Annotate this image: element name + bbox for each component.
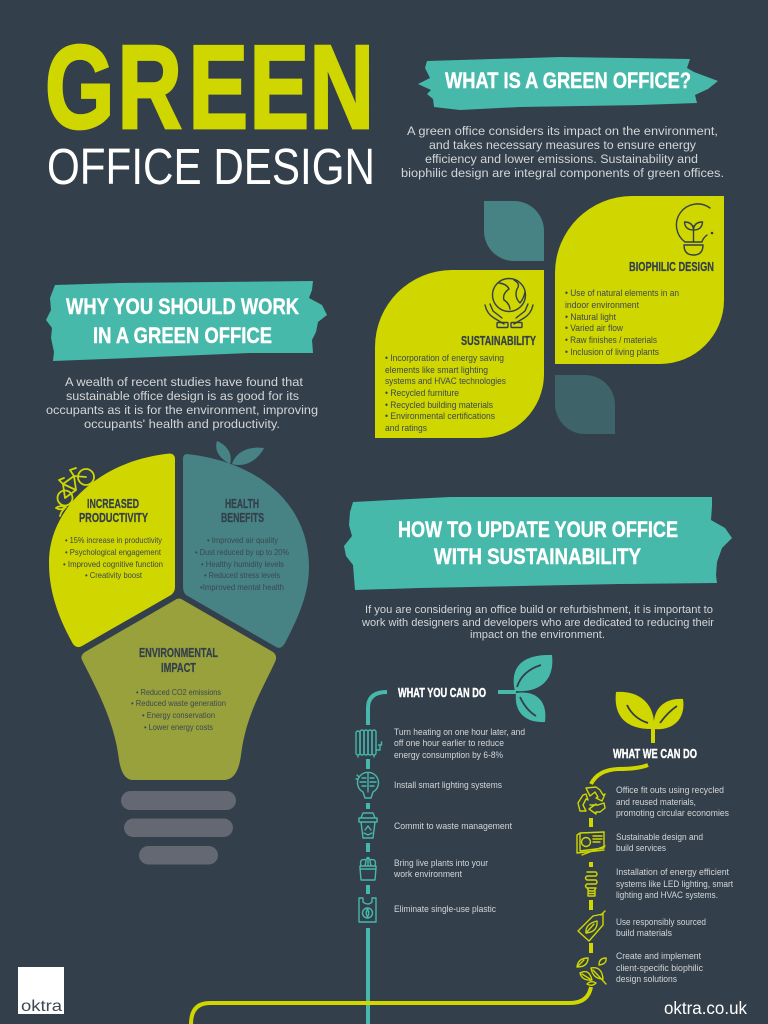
text: green office description <box>401 124 724 180</box>
list: sustainability: elements like smart lighting <box>385 365 488 375</box>
icon: eco tag <box>578 911 605 941</box>
panel: biophilic design <box>555 196 724 364</box>
text: how to update intro: impact on the environment. <box>470 629 605 641</box>
text: energy efficient systems: systems like LED lighting, smart <box>616 879 733 889</box>
heading: what is a green office: WHAT IS A GREEN OFFICE? <box>445 68 691 93</box>
text: biophilic solutions <box>616 951 703 984</box>
panel: what is a green office <box>401 57 724 180</box>
heading: why you should work <box>66 294 299 348</box>
panel: how to update your office <box>344 497 732 641</box>
list: health: •Improved mental health <box>200 582 284 592</box>
text: plastic: Eliminate single-use plastic <box>394 904 496 914</box>
text: studies summary: occupants' health and productivity. <box>84 417 280 431</box>
text: biophilic solutions: design solutions <box>616 974 677 984</box>
text: heating: Turn heating on one hour later, and <box>394 727 525 737</box>
list: biophilic design: • Varied air flow <box>565 323 623 333</box>
text: heating: off one hour earlier to reduce <box>394 738 504 748</box>
text: heating <box>394 727 525 760</box>
list: health: • Reduced stress levels <box>204 570 280 580</box>
heading: how to update <box>398 517 678 569</box>
panel: sustainability <box>375 270 544 438</box>
text: sourced materials: Use responsibly sourced <box>616 917 706 927</box>
text: studies summary: sustainable office design is as good for its <box>66 389 299 403</box>
item: sustainable design <box>577 832 703 855</box>
item: plastic <box>359 898 496 922</box>
icon: radiator <box>356 730 382 757</box>
list: biophilic design: • Raw finishes / materials <box>565 335 657 345</box>
text: energy efficient systems: Installation of energy efficient <box>616 867 729 877</box>
list: biophilic design <box>565 288 679 357</box>
heading: biophilic design: BIOPHILIC DESIGN <box>629 259 714 274</box>
brush banner: why work in a green office <box>46 281 327 361</box>
title: GREEN <box>45 22 374 154</box>
chart: light bulb benefits <box>49 441 309 864</box>
item: waste <box>359 813 512 838</box>
icon: yellow plant <box>616 692 683 743</box>
heading: health benefits: HEALTH <box>225 497 259 511</box>
list: health: • Dust reduced by up to 20% <box>195 547 289 557</box>
icon: light bulb with plant <box>676 204 713 255</box>
text: sourced materials <box>616 917 706 938</box>
panel: leaf diagram <box>375 196 724 438</box>
heading: environmental impact: ENVIRONMENTAL <box>139 646 218 660</box>
logo: oktra: oktra <box>21 998 62 1015</box>
panel: why you should work in a green office <box>46 281 327 431</box>
text: how to update intro <box>361 604 714 641</box>
list: environmental: • Energy conservation <box>142 710 215 720</box>
icon: leaves <box>577 958 606 985</box>
bulb base <box>121 791 236 864</box>
list: biophilic design: • Use of natural elements in an <box>565 288 679 298</box>
heading: environmental impact: IMPACT <box>161 661 196 675</box>
text: plants: work environment <box>393 869 462 879</box>
text: plants <box>393 858 488 879</box>
logo: oktra <box>18 967 64 1015</box>
list: productivity: • Improved cognitive function <box>63 559 163 569</box>
text: studies summary: occupants as it is for the environment, improving <box>46 403 318 417</box>
list: sustainability: • Recycled building materials <box>385 400 493 410</box>
icon: plastic bag <box>359 898 376 922</box>
icon: leaves <box>216 441 264 465</box>
text: biophilic solutions: client-specific biophilic <box>616 963 703 973</box>
heading: what you can do: WHAT YOU CAN DO <box>398 685 486 700</box>
yellow line <box>191 765 648 1024</box>
list: productivity <box>63 535 163 580</box>
timeline: what you can do <box>356 655 552 1024</box>
decorative leaf: top teal <box>484 201 544 261</box>
text: sustainable design <box>616 832 703 853</box>
decorative leaf: bottom teal <box>555 375 615 434</box>
list: health <box>195 535 289 592</box>
heading: why you should work: IN A GREEN OFFICE <box>93 323 272 348</box>
list: sustainability <box>385 353 506 433</box>
timeline: what we can do <box>191 692 733 1024</box>
heading: how to update: HOW TO UPDATE YOUR OFFICE <box>398 517 678 542</box>
item: plants <box>360 858 488 880</box>
text: studies summary <box>46 375 318 431</box>
item: smart lighting <box>356 772 502 798</box>
icon: hands holding globe <box>485 278 533 328</box>
bulb segment: health benefits <box>183 441 309 648</box>
list: environmental: • Lower energy costs <box>144 722 213 732</box>
item: recycled materials <box>578 785 729 818</box>
icon: bicycle <box>56 468 94 516</box>
text: plants: Bring live plants into your <box>394 858 488 868</box>
brush banner: how to update <box>344 497 732 590</box>
list: health: • Improved air quality <box>207 535 279 545</box>
list: sustainability: • Recycled furniture <box>385 388 459 398</box>
heading: increased productivity: PRODUCTIVITY <box>79 511 148 525</box>
item: heating <box>356 727 525 760</box>
text: studies summary: A wealth of recent studies have found that <box>65 375 304 389</box>
heading: sustainability: SUSTAINABILITY <box>461 333 536 348</box>
item: biophilic solutions <box>577 951 703 985</box>
website url: oktra.co.uk <box>664 998 747 1018</box>
text: how to update intro: If you are considering an office build or refurbishment, it is important to <box>365 604 713 616</box>
text: recycled materials: and reused materials, <box>616 797 696 807</box>
text: recycled materials <box>616 785 729 818</box>
icon: blueprint <box>577 832 605 855</box>
list: productivity: • Creativity boost <box>85 570 143 580</box>
bulb segment: environmental impact <box>81 598 276 780</box>
teal line <box>368 692 516 1024</box>
icon: recycling cup <box>359 813 377 838</box>
text: waste: Commit to waste management <box>394 821 512 831</box>
list: environmental: • Reduced CO2 emissions <box>136 687 221 697</box>
brush banner: what is a green office <box>418 57 718 110</box>
text: biophilic solutions: Create and implement <box>616 951 701 961</box>
text: green office description: and takes necessary measures to ensure energy <box>429 138 697 152</box>
heading: increased productivity: INCREASED <box>87 497 139 511</box>
heading: how to update: WITH SUSTAINABILITY <box>434 544 641 569</box>
text: sustainable design: Sustainable design and <box>616 832 703 842</box>
list: health: • Healthy humidity levels <box>201 559 284 569</box>
heading: health benefits: BENEFITS <box>221 511 264 525</box>
heading: why you should work: WHY YOU SHOULD WORK <box>66 294 299 319</box>
heading: health benefits <box>221 497 264 525</box>
icon: brain bulb <box>356 772 378 798</box>
heading: increased productivity <box>79 497 148 525</box>
heading: environmental impact <box>139 646 218 675</box>
icon: CFL bulb <box>586 872 597 896</box>
list: productivity: • 15% increase in productivity <box>65 535 163 545</box>
text: recycled materials: Office fit outs using recycled <box>616 785 724 795</box>
list: productivity: • Psychological engagement <box>65 547 162 557</box>
text: recycled materials: promoting circular economies <box>616 808 729 818</box>
list: sustainability: systems and HVAC technologies <box>385 376 506 386</box>
list: sustainability: and ratings <box>385 423 427 433</box>
title: OFFICE DESIGN <box>47 138 375 195</box>
bulb segment: increased productivity <box>49 454 175 647</box>
item: sourced materials <box>578 911 706 941</box>
text: green office description: efficiency and lower emissions. Sustainability and <box>425 152 698 166</box>
text: energy efficient systems: lighting and HVAC systems. <box>616 890 718 900</box>
text: sourced materials: build materials <box>616 928 672 938</box>
list: biophilic design: • Natural light <box>565 312 616 322</box>
list: sustainability: • Incorporation of energy saving <box>385 353 504 363</box>
icon: teal leaves <box>514 655 552 722</box>
text: sustainable design: build services <box>616 843 666 853</box>
text: green office description: biophilic design are integral components of green offices. <box>401 166 724 180</box>
item: energy efficient systems <box>586 867 733 900</box>
list: biophilic design: indoor environment <box>565 300 639 310</box>
icon: potted plant <box>360 858 376 880</box>
list: biophilic design: • Inclusion of living plants <box>565 347 659 357</box>
text: how to update intro: work with designers and developers who are dedicated to reducing their <box>361 617 714 629</box>
text: energy efficient systems <box>616 867 733 900</box>
list: sustainability: • Environmental certifications <box>385 411 495 421</box>
icon: recycle <box>578 787 605 814</box>
list: environmental: • Reduced waste generation <box>131 698 226 708</box>
text: smart lighting: Install smart lighting systems <box>394 780 502 790</box>
text: green office description: A green office considers its impact on the environment, <box>407 124 718 138</box>
list: environmental <box>131 687 226 732</box>
text: heating: energy consumption by 6-8% <box>394 750 503 760</box>
heading: what we can do: WHAT WE CAN DO <box>613 746 697 761</box>
